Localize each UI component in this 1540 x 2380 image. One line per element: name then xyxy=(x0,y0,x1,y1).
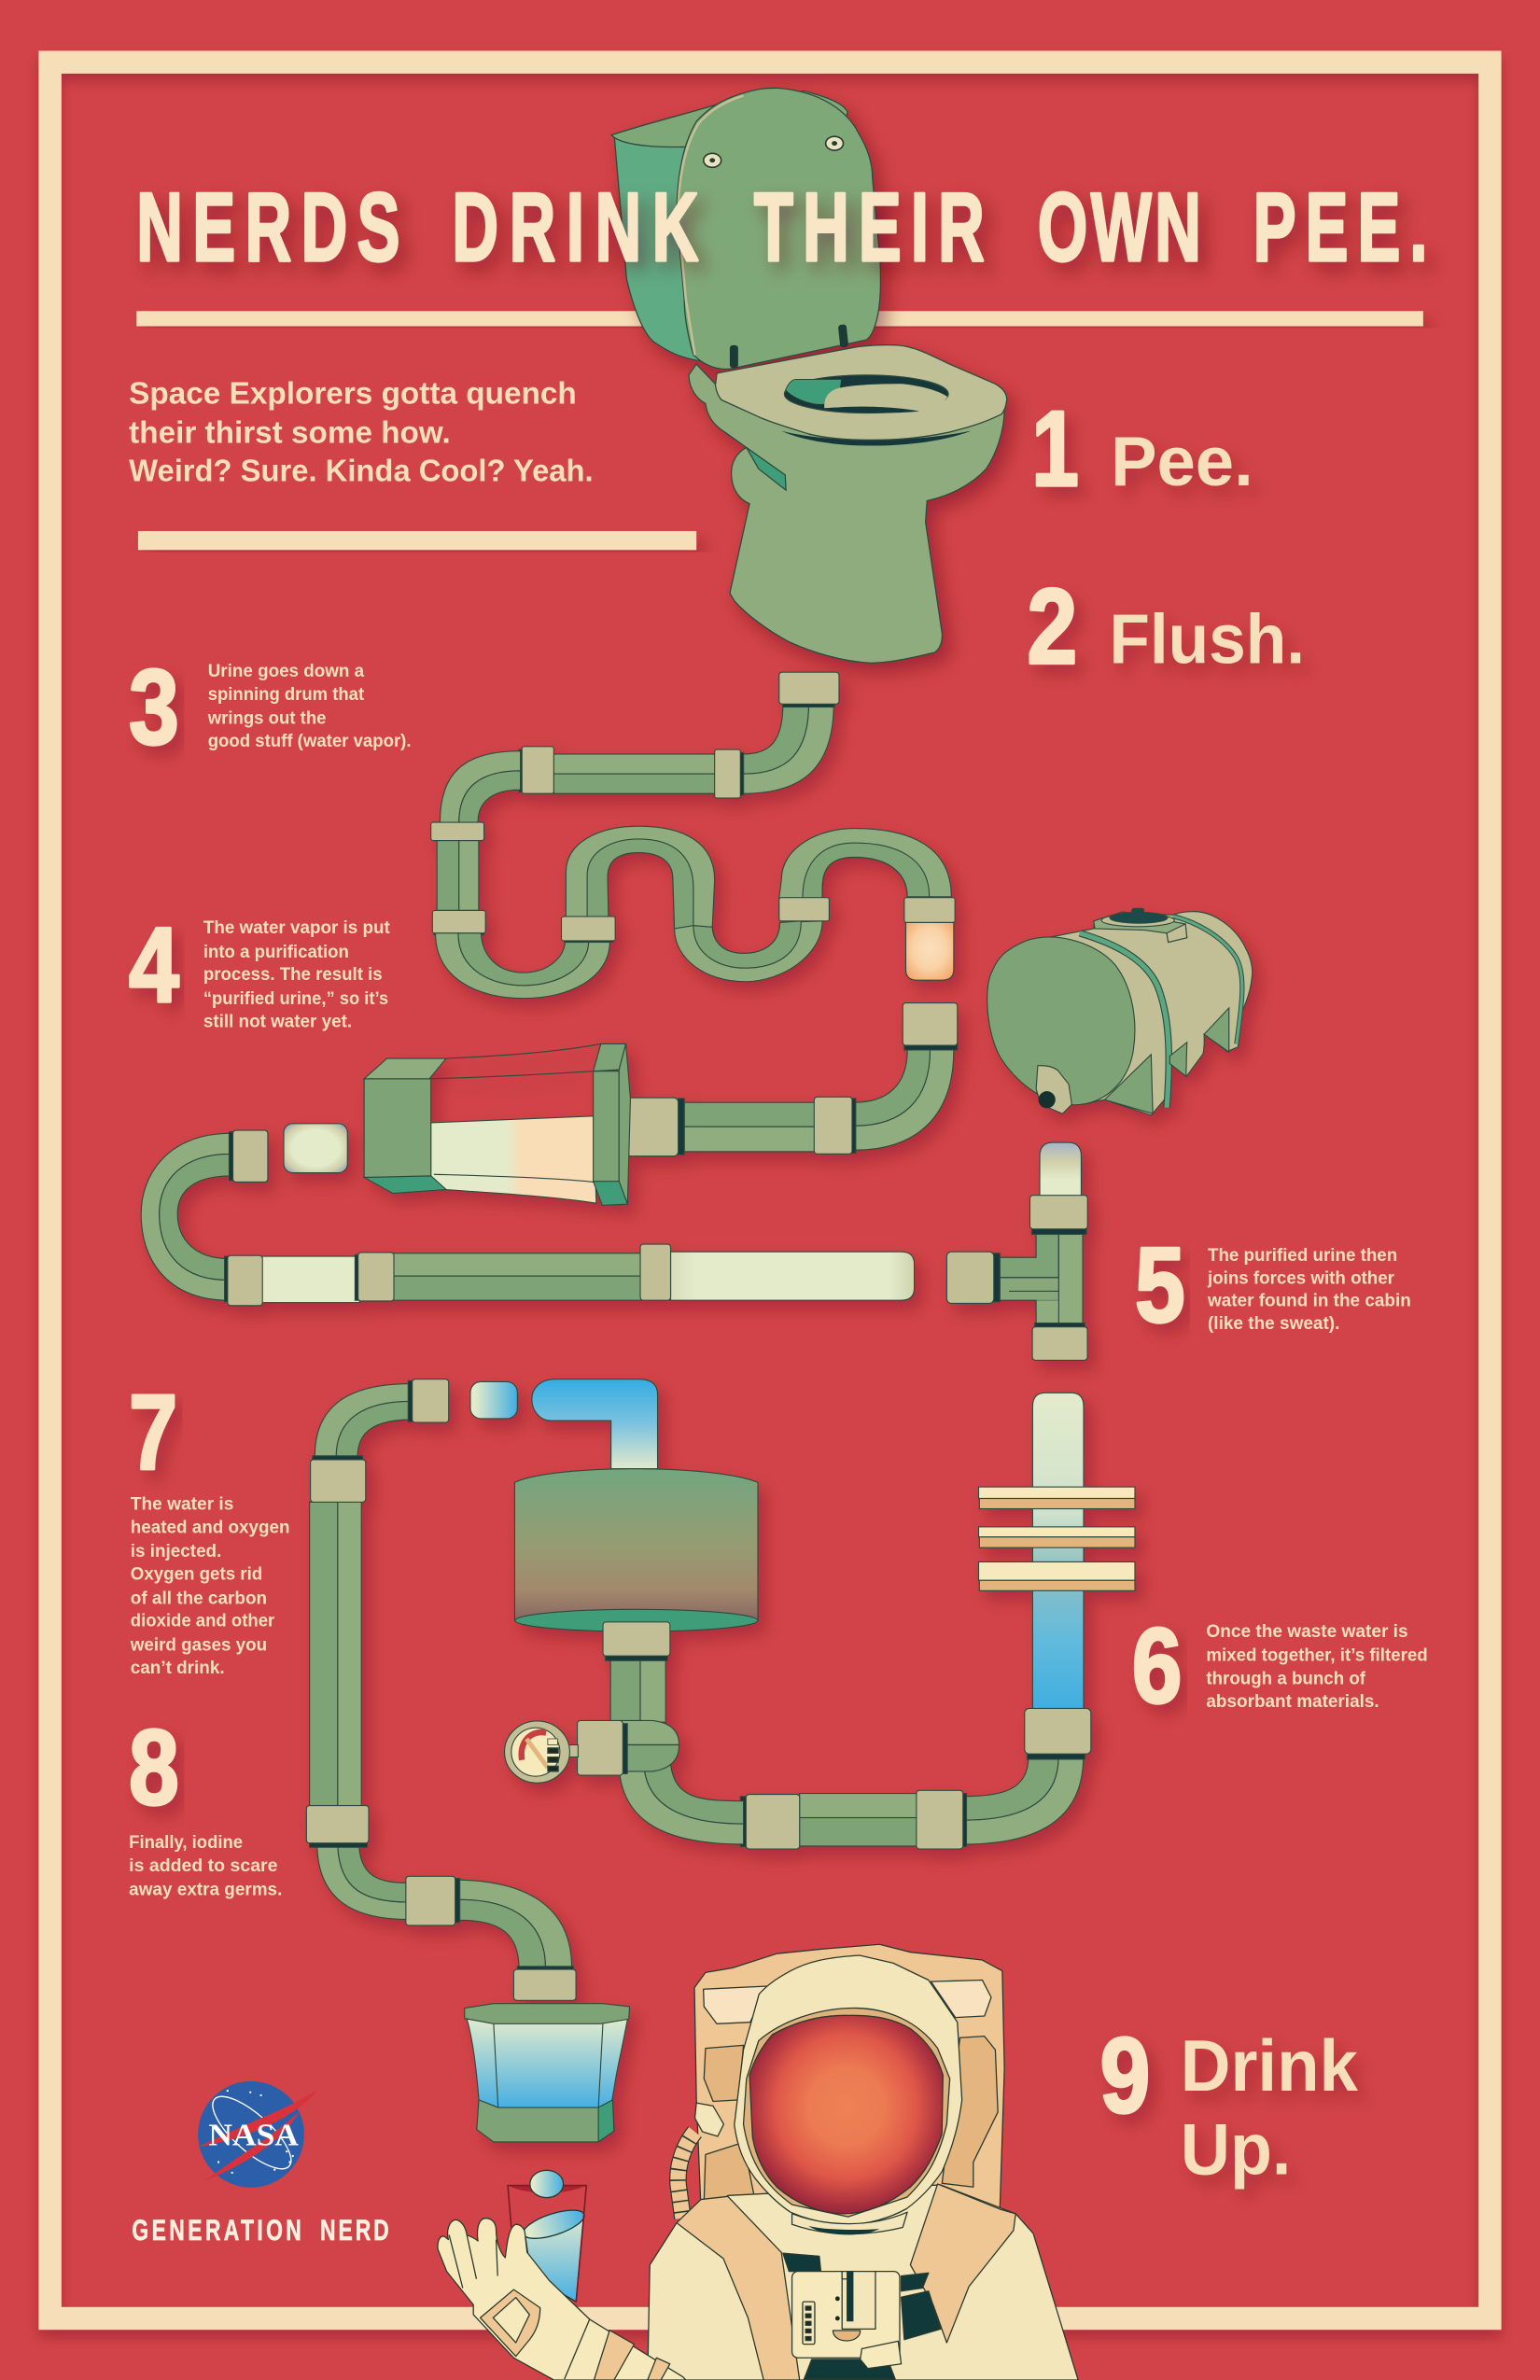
blue outlet xyxy=(532,1379,658,1469)
bottom straight xyxy=(225,1253,642,1306)
tee left collar xyxy=(946,1252,1000,1303)
toilet tank top xyxy=(611,91,847,147)
step 5 text: joins forces with other xyxy=(1207,1268,1394,1288)
seat hole xyxy=(784,375,948,413)
step 7 text: weird gases you xyxy=(130,1636,267,1656)
gauge xyxy=(505,1721,578,1783)
purifier left block xyxy=(364,1058,446,1194)
title: NERDS xyxy=(136,172,399,281)
title: THEIR xyxy=(754,172,985,281)
generation nerd wordmark xyxy=(132,2213,389,2247)
water column xyxy=(1032,1393,1084,1710)
vessel water xyxy=(467,2019,627,2107)
step 7 text: Oxygen gets rid xyxy=(131,1564,262,1584)
pipe long vertical xyxy=(310,1456,366,1806)
step 7 text: heated and oxygen xyxy=(131,1519,289,1538)
suit dark straps xyxy=(783,2253,941,2379)
step 3 text xyxy=(207,662,412,751)
title: OWN xyxy=(1038,172,1201,281)
step 5 number: 5 xyxy=(1135,1226,1185,1345)
visor xyxy=(749,2015,943,2214)
tee pipe xyxy=(1000,1234,1083,1325)
toilet tank xyxy=(614,138,728,361)
step 8 text: is added to scare xyxy=(129,1856,277,1876)
step 4 text: still not water yet. xyxy=(203,1013,352,1032)
orange vessel xyxy=(905,922,954,980)
pipe straight lower xyxy=(740,1790,967,1849)
tank outlet xyxy=(1036,1066,1071,1113)
drinking glass xyxy=(508,2186,587,2302)
pipe bend lower left xyxy=(619,1765,800,1849)
step 6 text xyxy=(1206,1622,1428,1712)
chest control box xyxy=(792,2272,902,2369)
step 3 text: good stuff (water vapor). xyxy=(208,732,412,751)
step 9 xyxy=(1100,2017,1359,2191)
small blue window xyxy=(470,1381,517,1419)
step 3 text: spinning drum that xyxy=(208,685,365,705)
step 5 text: (like the sweat). xyxy=(1208,1314,1339,1334)
filter layer 2 xyxy=(979,1527,1135,1547)
pipe bend right xyxy=(854,1003,958,1150)
elbow joint xyxy=(578,1720,679,1775)
tank body xyxy=(1019,912,1253,1115)
side panel left upper xyxy=(704,2045,744,2102)
left strap xyxy=(677,2196,800,2380)
generation nerd wordmark: NERD xyxy=(320,2213,389,2247)
step 5 text xyxy=(1207,1246,1411,1334)
step 1: Pee. xyxy=(1111,422,1253,500)
glove and sleeve xyxy=(438,2219,686,2380)
side panel right xyxy=(942,2037,998,2187)
icon: toilet xyxy=(611,88,1007,663)
step 6 text: mixed together, it’s filtered xyxy=(1206,1645,1428,1665)
intro text xyxy=(129,376,594,488)
backpack xyxy=(694,1944,1004,2209)
backpack pad right xyxy=(931,1980,991,2018)
step 6 text: through a bunch of xyxy=(1206,1669,1366,1688)
step 9: 9 xyxy=(1100,2017,1150,2135)
filter layer 3 xyxy=(979,1561,1135,1590)
pipe arch xyxy=(779,829,955,922)
pipe bend lower right xyxy=(963,1708,1091,1844)
glass section xyxy=(261,1256,359,1303)
glove back patch xyxy=(481,2289,540,2357)
purifier xyxy=(364,1043,630,1205)
pipe straight purifier xyxy=(626,1097,856,1156)
pipe U bend xyxy=(436,917,615,999)
step 7 text: of all the carbon xyxy=(131,1589,267,1608)
pipe under drum xyxy=(610,1659,665,1722)
step 3 number: 3 xyxy=(129,649,179,767)
step 7 text: is injected. xyxy=(131,1542,221,1561)
title: PEE. xyxy=(1253,172,1427,281)
step 2: 2 xyxy=(1028,567,1077,686)
step 7 text xyxy=(130,1495,289,1678)
title: DRINK xyxy=(452,172,698,281)
generation nerd wordmark: GENERATION xyxy=(132,2213,301,2247)
pipe bottom left bend xyxy=(306,1806,408,1919)
hinge xyxy=(838,324,848,348)
astronaut illustration xyxy=(438,1944,1078,2380)
step 4 number: 4 xyxy=(129,906,179,1025)
tank stripes xyxy=(1080,917,1242,1108)
step 9: Up. xyxy=(1181,2108,1291,2191)
tank cap xyxy=(1110,908,1168,923)
collar xyxy=(640,1244,671,1300)
helmet inner ring xyxy=(744,2009,950,2217)
hinge xyxy=(730,345,738,368)
step 4 text: into a purification xyxy=(203,943,349,962)
toilet bowl xyxy=(689,364,1004,663)
step 5 text: The purified urine then xyxy=(1208,1246,1397,1266)
pipe bend under toilet xyxy=(744,672,839,793)
icon: NASA logo: NASA xyxy=(208,2119,299,2153)
step 1: 1 xyxy=(1031,390,1079,509)
step 8 number: 8 xyxy=(129,1709,179,1827)
toilet lid xyxy=(677,88,880,369)
tank legs xyxy=(1104,1008,1229,1113)
heating drum xyxy=(514,1469,758,1631)
step 8 text xyxy=(129,1833,282,1899)
step 4 text: “purified urine,” so it’s xyxy=(203,989,388,1009)
step 4 text: The water vapor is put xyxy=(203,918,390,938)
sleeve bands xyxy=(594,2331,635,2380)
tank top pad xyxy=(1094,912,1187,943)
pipe final bend xyxy=(406,1876,576,2000)
seat hole lower crescent xyxy=(829,407,919,413)
step 7 text: dioxide and other xyxy=(131,1612,275,1631)
pipe big left bend xyxy=(141,1130,268,1300)
pipe straight top xyxy=(519,747,744,798)
intro text: Space Explorers gotta quench xyxy=(129,376,577,411)
filter layer 1 xyxy=(979,1487,1135,1509)
water drop xyxy=(530,2170,564,2198)
step 5 text: water found in the cabin xyxy=(1207,1292,1411,1311)
pipe S curve xyxy=(566,826,822,982)
long glass tube xyxy=(671,1252,915,1300)
intro text: their thirst some how. xyxy=(129,416,451,451)
hose connector xyxy=(695,2103,723,2136)
collection vessel xyxy=(465,2004,630,2142)
step 7 text: The water is xyxy=(131,1495,233,1515)
purifier liquid xyxy=(431,1116,596,1203)
small glass window xyxy=(284,1124,347,1173)
title rule xyxy=(136,311,1423,327)
step 2: Flush. xyxy=(1109,599,1305,678)
pipe vertical left xyxy=(432,841,485,934)
icon: NASA logo xyxy=(198,2081,318,2188)
title xyxy=(136,172,1427,281)
step 3 text: Urine goes down a xyxy=(208,662,364,681)
step 8 text: away extra germs. xyxy=(129,1880,282,1899)
tee top collar xyxy=(1029,1196,1087,1234)
step 6 text: absorbant materials. xyxy=(1206,1692,1379,1712)
side panel left lower xyxy=(704,2142,754,2203)
vessel base xyxy=(477,2100,614,2142)
intro rule xyxy=(138,531,696,550)
step 6 text: Once the waste water is xyxy=(1206,1622,1408,1642)
vessel cap xyxy=(465,2004,630,2023)
purifier glass xyxy=(429,1043,601,1079)
T junction xyxy=(946,1142,1087,1360)
toilet seat xyxy=(715,345,1007,440)
bowl rim shadow xyxy=(781,431,971,446)
toilet bowl teal sliver xyxy=(747,448,786,490)
icon: water tank xyxy=(987,908,1253,1115)
suit torso xyxy=(648,2185,1078,2380)
seat hole teal xyxy=(786,379,842,404)
pipe top left bend xyxy=(315,1379,449,1457)
purifier right block xyxy=(594,1043,630,1205)
right strap xyxy=(910,2184,1015,2343)
tee bottom collar xyxy=(1032,1323,1087,1360)
lid screw xyxy=(704,153,721,167)
air hose xyxy=(678,2132,695,2219)
helmet xyxy=(735,1955,962,2224)
step 4 text: process. The result is xyxy=(203,965,383,985)
toilet lid rim xyxy=(679,95,744,355)
top glass xyxy=(1040,1142,1081,1196)
step 2 xyxy=(1028,567,1305,686)
neck ring xyxy=(792,2212,907,2233)
tank front face xyxy=(987,937,1135,1105)
seat hole inner xyxy=(824,384,947,413)
intro text: Weird? Sure. Kinda Cool? Yeah. xyxy=(129,454,594,488)
step 7 number: 7 xyxy=(129,1374,177,1492)
step 4 text xyxy=(203,918,390,1032)
step 1 xyxy=(1031,390,1253,509)
pipe bend upper left xyxy=(431,751,521,841)
step 7 text: can’t drink. xyxy=(131,1659,225,1678)
pipe network xyxy=(141,672,1135,2142)
drum collar xyxy=(603,1622,670,1660)
step 3 text: wrings out the xyxy=(207,708,327,728)
step 8 text: Finally, iodine xyxy=(129,1833,243,1853)
step 6 number: 6 xyxy=(1132,1607,1182,1726)
collar shadow xyxy=(808,2226,879,2234)
backpack pad left xyxy=(704,1986,768,2023)
step 9: Drink xyxy=(1181,2024,1359,2107)
lid screw xyxy=(826,136,844,150)
